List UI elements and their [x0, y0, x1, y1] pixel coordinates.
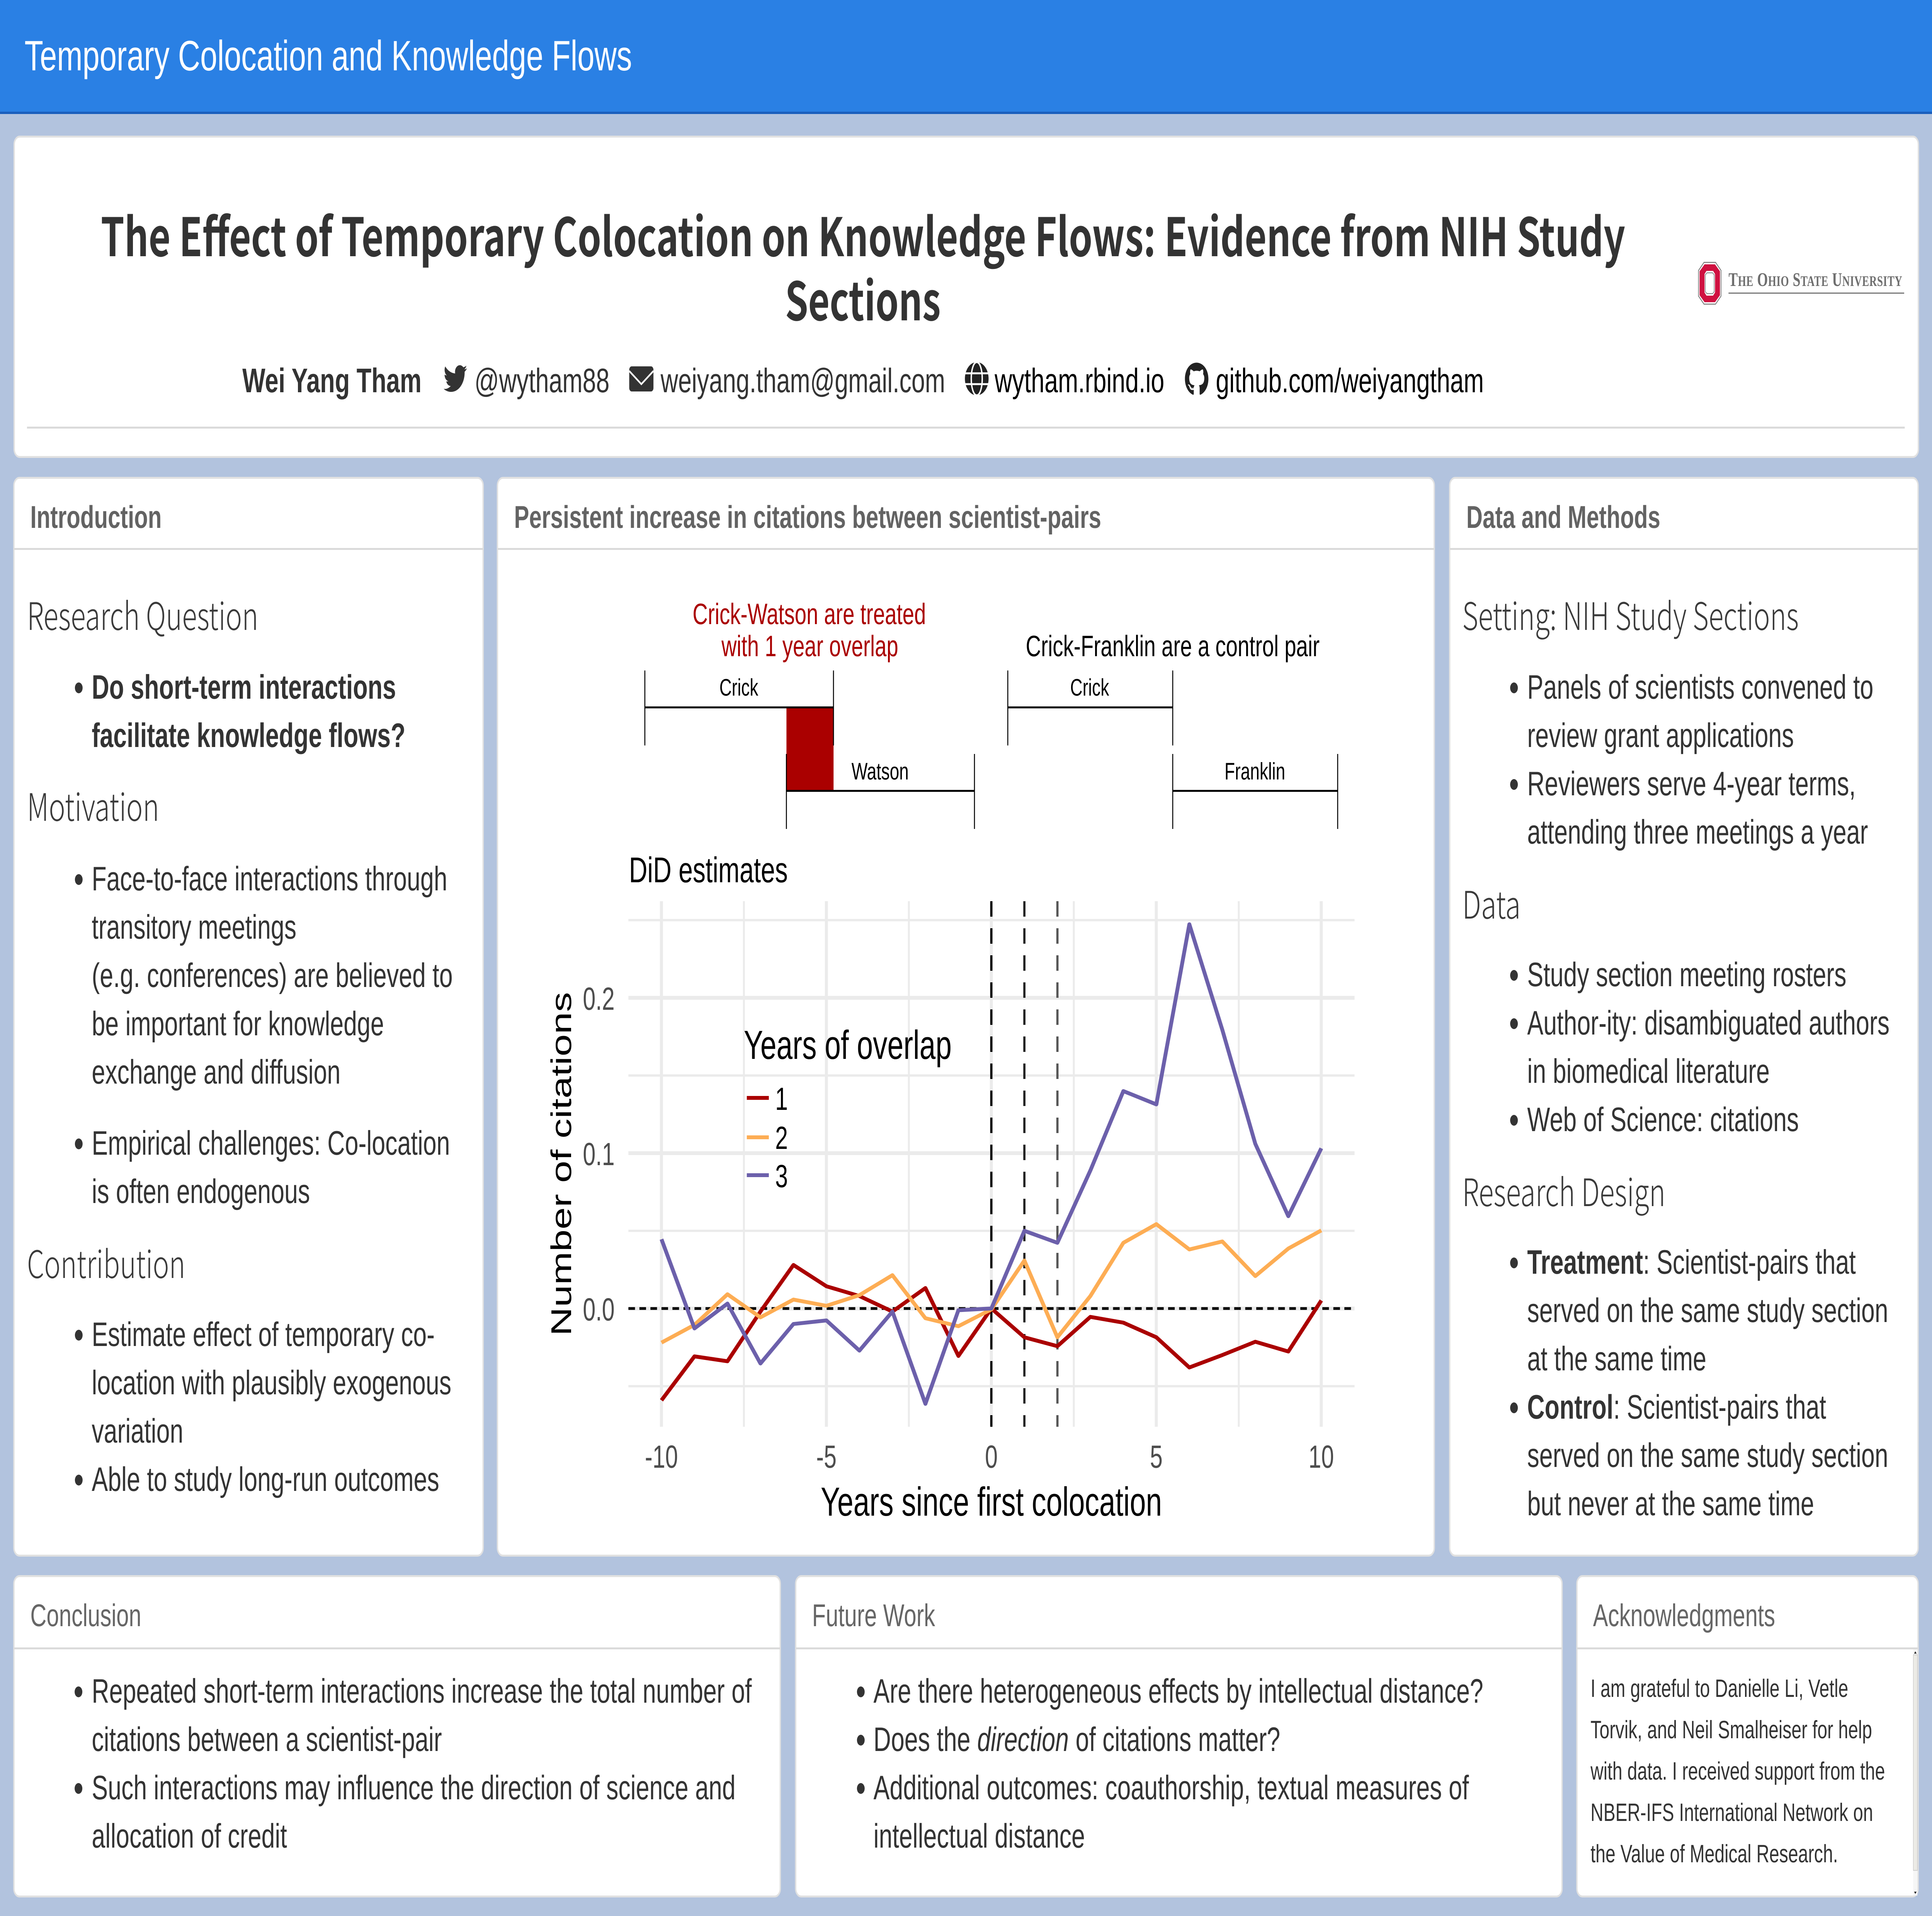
diagram: control pair timeline: Franklin [1225, 758, 1285, 785]
icon: mail [629, 366, 653, 391]
subheading: research design: Research Design [1462, 1162, 1665, 1217]
panel heading: Future Work [812, 1598, 935, 1633]
diagram: control pair timeline: Crick [1070, 674, 1109, 701]
x axis ticks [645, 1439, 1334, 1475]
y axis ticks [583, 981, 615, 1327]
bullets: motivation: Face-to-face interactions through [92, 859, 447, 898]
bullets: setting: Panels of scientists convened to [1527, 668, 1873, 706]
y axis title: Number of citations [546, 992, 577, 1336]
scrollbar [1913, 1649, 1917, 1896]
bullets: data: Web of Science: citations [1527, 1100, 1799, 1138]
caption: treated [692, 598, 926, 663]
logo: The Ohio State University: THE OHIO STATE UNIVERSITY [1728, 269, 1902, 290]
x axis ticks: 5 [1150, 1439, 1163, 1475]
logo: The Ohio State University [1699, 262, 1904, 304]
bullets: motivation: transitory meetings [92, 908, 296, 946]
poster title [101, 195, 1625, 336]
subheading: research question: Research Question [27, 586, 258, 641]
x axis ticks: -10 [645, 1439, 678, 1475]
panel heading: Conclusion [30, 1598, 141, 1633]
bullets: motivation: (e.g. conferences) are believed to [92, 956, 453, 994]
bullets: research question: facilitate knowledge flows? [92, 716, 405, 754]
y axis ticks: 0.1 [583, 1136, 615, 1172]
poster title: The Effect of Temporary Colocation on Knowledge Flows: Evidence from NIH Study [101, 195, 1625, 272]
caption: treated: Crick-Watson are treated [692, 598, 926, 631]
bullets: contribution: Estimate effect of temporary co- [92, 1315, 435, 1353]
legend: 1 [775, 1081, 788, 1117]
y axis ticks: 0.2 [583, 981, 615, 1017]
panel: conclusion [14, 1576, 780, 1897]
bullets: data: Study section meeting rosters [1527, 955, 1847, 994]
acknowledgments text: I am grateful to Danielle Li, Vetle [1590, 1674, 1848, 1702]
legend [744, 1023, 952, 1194]
x axis ticks: 10 [1308, 1439, 1334, 1475]
twitter handle: @wytham88 [474, 361, 609, 400]
bullets: conclusion [75, 1672, 752, 1855]
diagram: treated pair timeline: Crick [719, 674, 759, 701]
panel: data and methods [1450, 478, 1918, 1556]
legend: 2 [775, 1120, 788, 1156]
bullets: future work: Are there heterogeneous effects by intellectual distance? [874, 1672, 1483, 1710]
bullets: conclusion: citations between a scientist-pair [92, 1720, 442, 1758]
bullets: contribution: variation [92, 1412, 183, 1450]
email: weiyang.tham@gmail.com [660, 361, 945, 400]
panel heading: Data and Methods [1466, 500, 1660, 535]
subheading: setting: Setting: NIH Study Sections [1462, 586, 1799, 641]
icon: github [1185, 362, 1208, 395]
caption: treated: with 1 year overlap [721, 630, 898, 663]
panel: introduction [14, 478, 483, 1556]
bullets: research design: but never at the same time [1527, 1484, 1814, 1523]
github link: github.com/weiyangtham [1216, 361, 1484, 400]
bullets: motivation: exchange and diffusion [92, 1053, 340, 1091]
website: wytham.rbind.io [994, 361, 1164, 400]
bullets: data [1510, 955, 1889, 1138]
panel heading: Introduction [30, 500, 162, 535]
panel: future work [796, 1576, 1562, 1897]
caption: control: Crick-Franklin are a control pair [1026, 630, 1320, 663]
diagram: treated pair timeline: Watson [852, 758, 909, 785]
diagram: treated pair timeline [645, 598, 975, 829]
poster title: Sections [785, 259, 940, 336]
icon: twitter [444, 365, 467, 392]
author name: Wei Yang Tham [242, 361, 422, 400]
bullets: research question: Do short-term interactions [92, 668, 396, 706]
reference lines [628, 901, 1355, 1427]
bullets: research design [1510, 1243, 1888, 1523]
subheading: motivation: Motivation [27, 777, 159, 832]
bullets: conclusion: allocation of credit [92, 1817, 287, 1855]
top bar [0, 0, 1932, 114]
bullets: future work: Additional outcomes: coauthorship, textual measures of [874, 1768, 1469, 1807]
bullets: conclusion: Repeated short-term interactions increase the total number of [92, 1672, 752, 1710]
series: 3 years [662, 924, 1321, 1404]
bullets: future work: intellectual distance [874, 1817, 1085, 1855]
bullets: research design: Treatment: Scientist-pairs that [1527, 1243, 1856, 1281]
icon: globe [965, 362, 988, 395]
acknowledgments text: NBER-IFS International Network on [1590, 1798, 1873, 1826]
bullets: setting: review grant applications [1527, 716, 1794, 754]
panel: persistent increase in citations [497, 478, 1434, 1556]
bullets: conclusion: Such interactions may influence the direction of science and [92, 1768, 736, 1807]
subheading: data: Data [1462, 875, 1520, 930]
subheading: contribution: Contribution [27, 1234, 185, 1289]
bullets: motivation: Empirical challenges: Co-location [92, 1124, 450, 1162]
bullets: setting [1510, 668, 1873, 851]
x axis title: Years since first colocation [821, 1479, 1162, 1525]
bullets: motivation: is often endogenous [92, 1172, 310, 1210]
bullets: future work [857, 1672, 1483, 1855]
bullets: setting: Reviewers serve 4-year terms, [1527, 764, 1856, 803]
bullets: contribution: location with plausibly exogenous [92, 1363, 451, 1402]
bullets: contribution: Able to study long-run outcomes [92, 1460, 439, 1498]
x axis ticks: 0 [985, 1439, 998, 1475]
panel heading: Acknowledgments [1593, 1598, 1775, 1633]
data series [662, 924, 1321, 1404]
bullets: data: Author-ity: disambiguated authors [1527, 1004, 1889, 1042]
acknowledgments text: with data. I received support from the [1590, 1757, 1885, 1785]
panel: acknowledgments [1577, 1576, 1918, 1897]
bullets: setting: attending three meetings a year [1527, 813, 1868, 851]
chart title: DiD estimates [629, 850, 788, 890]
legend: 3 [775, 1158, 788, 1194]
bullets: motivation: be important for knowledge [92, 1004, 384, 1043]
bullets: research design: served on the same study section [1527, 1436, 1888, 1474]
bullets: motivation [75, 859, 453, 1210]
bullets: research design: at the same time [1527, 1339, 1706, 1378]
bullets: future work: Does the direction of citations matter? [874, 1720, 1280, 1758]
diagram: control pair timeline [1007, 630, 1338, 829]
acknowledgments text: the Value of Medical Research. [1590, 1839, 1838, 1868]
legend: Years of overlap [744, 1023, 952, 1068]
bullets: contribution [75, 1315, 451, 1498]
acknowledgments text [1590, 1674, 1885, 1868]
panel: title [14, 137, 1918, 457]
bullets: research question [75, 668, 405, 754]
panel heading: Persistent increase in citations between scientist-pairs [514, 500, 1101, 535]
bullets: research design: Control: Scientist-pairs that [1527, 1388, 1826, 1426]
bullets: data: in biomedical literature [1527, 1052, 1770, 1090]
y axis ticks: 0.0 [583, 1292, 615, 1327]
line chart: DiD estimates [546, 901, 1355, 1525]
top bar title: Temporary Colocation and Knowledge Flows [24, 32, 632, 80]
bullets: research design: served on the same study section [1527, 1291, 1888, 1329]
x axis ticks: -5 [816, 1439, 837, 1475]
acknowledgments text: Torvik, and Neil Smalheiser for help [1590, 1715, 1872, 1744]
series: 2 years [662, 1224, 1321, 1343]
series: 1 year [662, 1265, 1321, 1400]
